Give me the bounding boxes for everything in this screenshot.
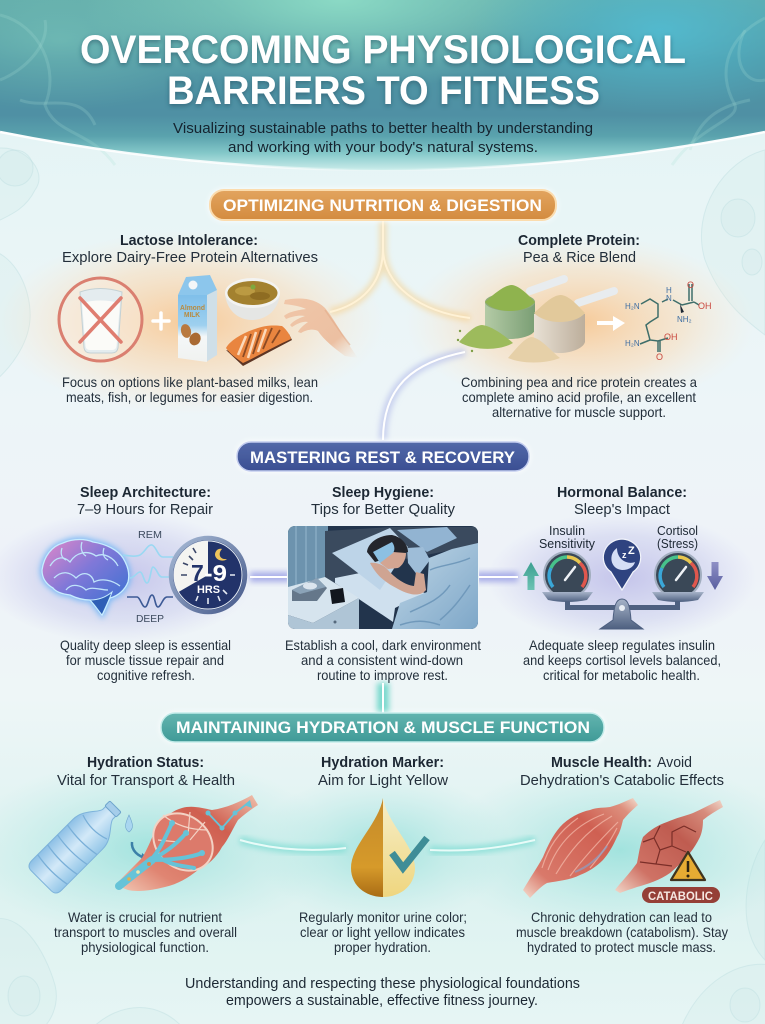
subtitle: and working with your body's natural systems. bbox=[228, 140, 538, 156]
icon: sleep moon bubble: z bbox=[622, 550, 627, 560]
sleep architecture body bbox=[60, 638, 231, 683]
icon: amino acid molecule: OH bbox=[664, 332, 678, 342]
mattress bbox=[335, 573, 425, 622]
rice powder pile bbox=[508, 337, 560, 362]
cortisol gauge bbox=[655, 552, 701, 598]
section pill: hydration bbox=[161, 713, 604, 742]
protein body text bbox=[461, 375, 697, 420]
protein body text: Combining pea and rice protein creates a bbox=[461, 375, 697, 390]
hormonal balance heading bbox=[557, 485, 687, 518]
dna helix right bbox=[672, 18, 765, 165]
icon: arrow to molecule bbox=[597, 316, 625, 331]
protein body text: alternative for muscle support. bbox=[492, 405, 666, 420]
sleep hygiene body: and a consistent wind-down bbox=[301, 653, 463, 668]
icon: urine color drop with check bbox=[351, 798, 427, 897]
icon: crossed out milk glass bbox=[59, 278, 142, 361]
icon: up arrow bbox=[523, 562, 539, 590]
hormonal balance body: Adequate sleep regulates insulin bbox=[529, 638, 715, 653]
connector: sleep horizontal bbox=[250, 572, 518, 582]
hydration status heading bbox=[57, 755, 235, 789]
sleep hygiene heading bbox=[311, 485, 456, 518]
hydration marker heading: Hydration Marker: bbox=[321, 755, 444, 771]
icon: 7-9 hours clock: HRS bbox=[197, 584, 220, 596]
icon: amino acid molecule: O bbox=[687, 280, 694, 290]
sleep architecture body: Quality deep sleep is essential bbox=[60, 638, 231, 653]
icon: almond milk carton: Almond bbox=[180, 305, 205, 312]
hydration marker body: clear or light yellow indicates bbox=[300, 925, 465, 940]
icon: almond milk carton bbox=[178, 275, 217, 362]
sleep architecture heading: 7–9 Hours for Repair bbox=[77, 502, 213, 518]
complete protein heading bbox=[518, 233, 640, 266]
sleep stage waves: REM bbox=[138, 530, 162, 541]
hormone labels bbox=[539, 524, 698, 551]
icon: amino acid molecule: NH₂ bbox=[677, 315, 692, 324]
balance scale with gauges bbox=[542, 552, 704, 629]
subtitle bbox=[173, 121, 593, 156]
nightstand bbox=[288, 577, 359, 623]
icon: bowl of legumes bbox=[225, 278, 280, 320]
muscle health body: Chronic dehydration can lead to bbox=[531, 910, 712, 925]
icon: catabolic muscle bbox=[615, 800, 723, 893]
headboard bbox=[325, 527, 478, 583]
sleep architecture body: for muscle tissue repair and bbox=[66, 653, 224, 668]
icon: 7-9 hours clock: 7 bbox=[191, 560, 204, 586]
hydration status heading: Hydration Status: bbox=[87, 755, 204, 771]
lactose heading: Explore Dairy-Free Protein Alternatives bbox=[62, 250, 318, 266]
lactose body text: meats, fish, or legumes for easier digestion. bbox=[66, 390, 313, 405]
icon: muscle cross section with water channels bbox=[115, 795, 258, 891]
hormone labels: Insulin bbox=[549, 524, 585, 538]
hydration status body: Water is crucial for nutrient bbox=[68, 910, 222, 925]
sleep hygiene body: routine to improve rest. bbox=[317, 668, 448, 683]
hydration marker heading bbox=[318, 755, 448, 789]
muscle health body bbox=[516, 910, 728, 955]
white arc bbox=[0, 132, 765, 170]
closing statement bbox=[185, 976, 580, 1009]
connector: protein to rest bbox=[383, 352, 465, 440]
sleep hygiene heading: Tips for Better Quality bbox=[311, 502, 456, 518]
icon: protein scoops bbox=[457, 279, 614, 362]
hormonal balance heading: Hormonal Balance: bbox=[557, 485, 687, 501]
sleep hygiene heading: Sleep Hygiene: bbox=[332, 485, 434, 501]
hydration marker body: Regularly monitor urine color; bbox=[299, 910, 467, 925]
dna helix left bbox=[0, 15, 115, 165]
scale pans and beam bbox=[542, 592, 593, 602]
icon: down arrow bbox=[707, 562, 723, 590]
icon: healthy muscle bbox=[523, 798, 638, 898]
icon: sleep moon bubble bbox=[603, 539, 641, 590]
title: OVERCOMING PHYSIOLOGICAL bbox=[80, 28, 686, 72]
green powder pile bbox=[457, 325, 513, 352]
section pill: hydration: MAINTAINING HYDRATION & MUSCLE FUNCTION bbox=[176, 718, 590, 737]
icon: plus bbox=[153, 313, 169, 329]
hormonal balance body bbox=[523, 638, 721, 683]
section glows bbox=[0, 230, 765, 940]
icon: neon brain bbox=[42, 540, 129, 615]
title: BARRIERS TO FITNESS bbox=[167, 69, 600, 113]
sleeve bbox=[407, 547, 429, 574]
blanket bbox=[392, 543, 478, 629]
sleep hygiene body: Establish a cool, dark environment bbox=[285, 638, 481, 653]
hormonal balance body: and keeps cortisol levels balanced, bbox=[523, 653, 721, 668]
icon: water bottle bbox=[26, 792, 130, 896]
hydration status heading: Vital for Transport & Health bbox=[57, 773, 235, 789]
icon: amino acid molecule: H bbox=[666, 286, 672, 295]
closing statement: empowers a sustainable, effective fitness journey. bbox=[226, 993, 538, 1009]
connector: rest to hydration bbox=[377, 683, 389, 715]
header banner bbox=[0, 0, 765, 170]
connector: hydration horizontal bbox=[240, 840, 535, 851]
hormonal balance heading: Sleep's Impact bbox=[574, 502, 670, 518]
icon: amino acid molecule bbox=[625, 280, 712, 362]
muscle health heading: Muscle Health: bbox=[551, 755, 652, 771]
icon: amino acid molecule: O bbox=[656, 352, 663, 362]
green scoop bbox=[485, 279, 564, 339]
beige scoop bbox=[534, 291, 614, 353]
hydration status body: physiological function. bbox=[81, 940, 209, 955]
badge: catabolic: CATABOLIC bbox=[648, 889, 713, 903]
muscle health heading: Dehydration's Catabolic Effects bbox=[520, 773, 724, 789]
muscle health heading bbox=[520, 755, 724, 789]
photo: person sleeping with eye mask bbox=[287, 525, 479, 630]
section pill: nutrition bbox=[210, 190, 556, 220]
icon: almond milk carton: MILK bbox=[184, 312, 200, 319]
connector: nutrition branches bbox=[330, 220, 470, 318]
sleep architecture body: cognitive refresh. bbox=[97, 668, 195, 683]
hormone labels: (Stress) bbox=[657, 537, 698, 551]
hydration marker body: proper hydration. bbox=[334, 940, 431, 955]
hormonal balance body: critical for metabolic health. bbox=[543, 668, 700, 683]
icon: sleep moon bubble: Z bbox=[628, 545, 635, 557]
icon: warning triangle bbox=[671, 852, 705, 880]
icon: amino acid molecule: H₂N bbox=[625, 302, 640, 311]
icon: amino acid molecule: H₂N bbox=[625, 339, 640, 348]
icon: 7-9 hours clock bbox=[171, 538, 245, 612]
closing statement: Understanding and respecting these physiological foundations bbox=[185, 976, 580, 992]
hair, face, mask bbox=[367, 535, 408, 562]
section pill: rest and recovery: MASTERING REST & RECOVERY bbox=[250, 448, 516, 467]
room and curtain bbox=[288, 526, 478, 629]
hormone labels: Sensitivity bbox=[539, 537, 596, 551]
hormone labels: Cortisol bbox=[657, 524, 698, 538]
icon: 7-9 hours clock: -9 bbox=[204, 560, 227, 586]
muscle health body: muscle breakdown (catabolism). Stay bbox=[516, 925, 728, 940]
hydration status body bbox=[54, 910, 237, 955]
lactose heading bbox=[62, 233, 318, 266]
complete protein heading: Pea & Rice Blend bbox=[523, 250, 636, 266]
hydration status body: transport to muscles and overall bbox=[54, 925, 237, 940]
subtitle: Visualizing sustainable paths to better health by understanding bbox=[173, 121, 593, 137]
hydration marker heading: Aim for Light Yellow bbox=[318, 773, 448, 789]
title bbox=[80, 28, 686, 113]
section pill: nutrition: OPTIMIZING NUTRITION & DIGESTION bbox=[223, 196, 542, 215]
muscle health body: hydrated to protect muscle mass. bbox=[527, 940, 716, 955]
lactose body text bbox=[62, 375, 318, 405]
hydration marker body bbox=[299, 910, 467, 955]
icon: amino acid molecule: N bbox=[666, 294, 672, 303]
icon: reaching hand bbox=[284, 299, 358, 358]
icon: amino acid molecule: OH bbox=[698, 301, 712, 311]
pillows bbox=[397, 527, 457, 552]
lactose heading: Lactose Intolerance: bbox=[120, 233, 258, 249]
icon: grilled salmon bbox=[226, 325, 292, 366]
sleep hygiene body bbox=[285, 638, 481, 683]
sleep stage waves bbox=[123, 530, 173, 625]
muscle health heading: Avoid bbox=[657, 755, 692, 771]
sleep architecture heading: Sleep Architecture: bbox=[80, 485, 211, 501]
lactose body text: Focus on options like plant-based milks, lean bbox=[62, 375, 318, 390]
sleep architecture heading bbox=[77, 485, 213, 518]
icon: water drip and arrow bbox=[126, 815, 148, 861]
arm bbox=[370, 563, 426, 595]
section pill: rest and recovery bbox=[237, 442, 529, 471]
complete protein heading: Complete Protein: bbox=[518, 233, 640, 249]
protein body text: complete amino acid profile, an excellent bbox=[462, 390, 696, 405]
insulin gauge bbox=[544, 552, 590, 598]
sleep stage waves: DEEP bbox=[136, 614, 164, 625]
